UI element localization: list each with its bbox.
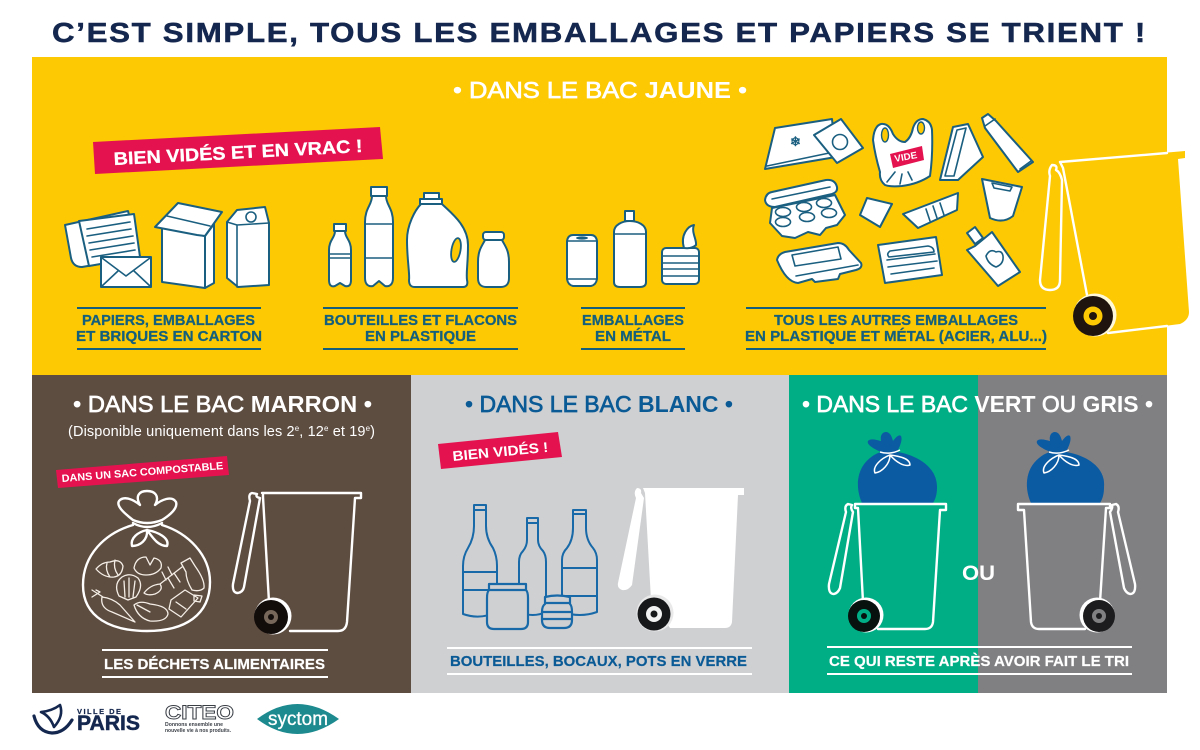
icon: egg box bbox=[765, 180, 845, 238]
logo: syctom bbox=[257, 704, 339, 734]
icon: plastic bag vide bbox=[873, 119, 932, 186]
subtitle: disponibilité: e bbox=[324, 424, 329, 433]
icon: chips bag bbox=[814, 119, 863, 163]
icon: blue bag left bbox=[858, 432, 937, 503]
heading: bac marron: • DANS LE BAC MARRON • bbox=[73, 391, 372, 417]
icon: foam clamshell bbox=[777, 243, 861, 283]
icon: tray bbox=[903, 193, 958, 228]
label: déchets alimentaires: LES DÉCHETS ALIMENTAIRES bbox=[104, 656, 325, 673]
icon: yellow bin bbox=[1040, 151, 1189, 336]
icon: compote pouch bbox=[967, 227, 1020, 286]
callout: bien vidés: BIEN VIDÉS ! bbox=[452, 439, 549, 464]
label: autres emballages: TOUS LES AUTRES EMBALLAGES bbox=[774, 313, 1018, 329]
icon: large plastic bottle bbox=[365, 187, 393, 286]
icon: yogurt pot bbox=[982, 179, 1022, 221]
icon: grey bin bbox=[1018, 504, 1135, 632]
subtitle: disponibilité: et 19 bbox=[329, 424, 365, 440]
icon: drink can bbox=[567, 235, 597, 286]
icon: small plastic bottle bbox=[329, 224, 351, 286]
label: bouteilles plastique: BOUTEILLES ET FLACONS bbox=[324, 313, 517, 329]
logo: citeo: Donnons ensemble une bbox=[165, 722, 223, 728]
icon: tin can bbox=[662, 225, 699, 284]
panel: bac blanc bbox=[411, 375, 789, 693]
label: emballages métal: EN MÉTAL bbox=[595, 328, 671, 345]
logo: ville de paris bbox=[34, 705, 140, 735]
icon: compost bag with food waste bbox=[83, 491, 210, 631]
panel: bac vert ou gris bbox=[789, 375, 1167, 693]
icon: glass bottles and jars bbox=[463, 505, 597, 629]
heading: bac vert ou gris: • DANS LE BAC VERT OU GRIS • bbox=[802, 391, 1153, 417]
label: papiers cartons: ET BRIQUES EN CARTON bbox=[76, 329, 262, 345]
label: ce qui reste: CE QUI RESTE APRÈS AVOIR FAIT LE TRI bbox=[829, 653, 1129, 670]
callout: bien vidés bbox=[438, 432, 562, 469]
icon: sandwich pack bbox=[940, 124, 983, 180]
subtitle: disponibilité: , 12 bbox=[299, 424, 324, 440]
logo: syctom: syctom bbox=[268, 709, 328, 730]
icon: milk carton bbox=[227, 207, 269, 287]
icon: detergent jug bbox=[407, 193, 468, 287]
heading: bac jaune: • DANS LE BAC JAUNE • bbox=[453, 77, 747, 103]
icon: ribbed tray bbox=[878, 237, 942, 283]
logo: citeo: CITEO bbox=[165, 703, 234, 724]
label: emballages métal: EMBALLAGES bbox=[582, 313, 684, 329]
icon: newspaper bbox=[65, 211, 140, 267]
title: C’EST SIMPLE, TOUS LES EMBALLAGES ET PAPIERS SE TRIENT ! bbox=[52, 17, 1147, 48]
icon: cardboard box bbox=[155, 203, 222, 288]
subtitle: disponibilité: (Disponible uniquement dans les 2 bbox=[68, 424, 295, 440]
logo: ville de paris: VILLE DE bbox=[77, 707, 121, 716]
label: verre: BOUTEILLES, BOCAUX, POTS EN VERRE bbox=[450, 653, 747, 670]
icon: pod bbox=[860, 198, 892, 227]
icon: frozen food bag bbox=[765, 119, 836, 169]
icon: spray can bbox=[614, 211, 646, 287]
label: bouteilles plastique: EN PLASTIQUE bbox=[365, 329, 476, 345]
icon: blue bag right bbox=[1027, 432, 1104, 503]
callout: sac compostable: DANS UN SAC COMPOSTABLE bbox=[61, 460, 224, 485]
panel: bac marron bbox=[32, 375, 411, 693]
subtitle: disponibilité: e bbox=[295, 424, 300, 433]
text: ou: OU bbox=[962, 562, 995, 585]
icon: tube bbox=[982, 114, 1033, 172]
icon: white bin bbox=[618, 488, 744, 632]
icon: frozen food bag: ❄ bbox=[790, 134, 801, 149]
label: bouteilles plastique bbox=[323, 307, 518, 350]
label: papiers cartons bbox=[76, 307, 262, 350]
icon: envelope bbox=[101, 257, 151, 287]
icon: flacon bbox=[478, 232, 509, 287]
label: autres emballages: EN PLASTIQUE ET MÉTAL (ACIER, ALU...) bbox=[745, 328, 1047, 345]
label: emballages métal bbox=[581, 307, 685, 350]
icon: green bin bbox=[829, 504, 946, 632]
heading: bac blanc: • DANS LE BAC BLANC • bbox=[465, 391, 733, 417]
callout: sac compostable bbox=[56, 456, 229, 488]
subtitle: disponibilité: ) bbox=[370, 424, 375, 440]
label: autres emballages bbox=[745, 307, 1047, 350]
panel: bac jaune bbox=[32, 57, 1189, 375]
logo: citeo: nouvelle vie à nos produits. bbox=[165, 728, 231, 734]
label: papiers cartons: PAPIERS, EMBALLAGES bbox=[82, 313, 255, 329]
logo: ville de paris: PARIS bbox=[77, 712, 140, 735]
subtitle: disponibilité: e bbox=[366, 424, 371, 433]
callout: bien vidés et en vrac bbox=[93, 127, 383, 174]
icon: brown bin bbox=[233, 493, 361, 634]
logo: citeo bbox=[165, 703, 234, 734]
callout: bien vidés et en vrac: BIEN VIDÉS ET EN VRAC ! bbox=[113, 135, 363, 169]
icon: plastic bag vide: VIDE bbox=[894, 150, 918, 165]
